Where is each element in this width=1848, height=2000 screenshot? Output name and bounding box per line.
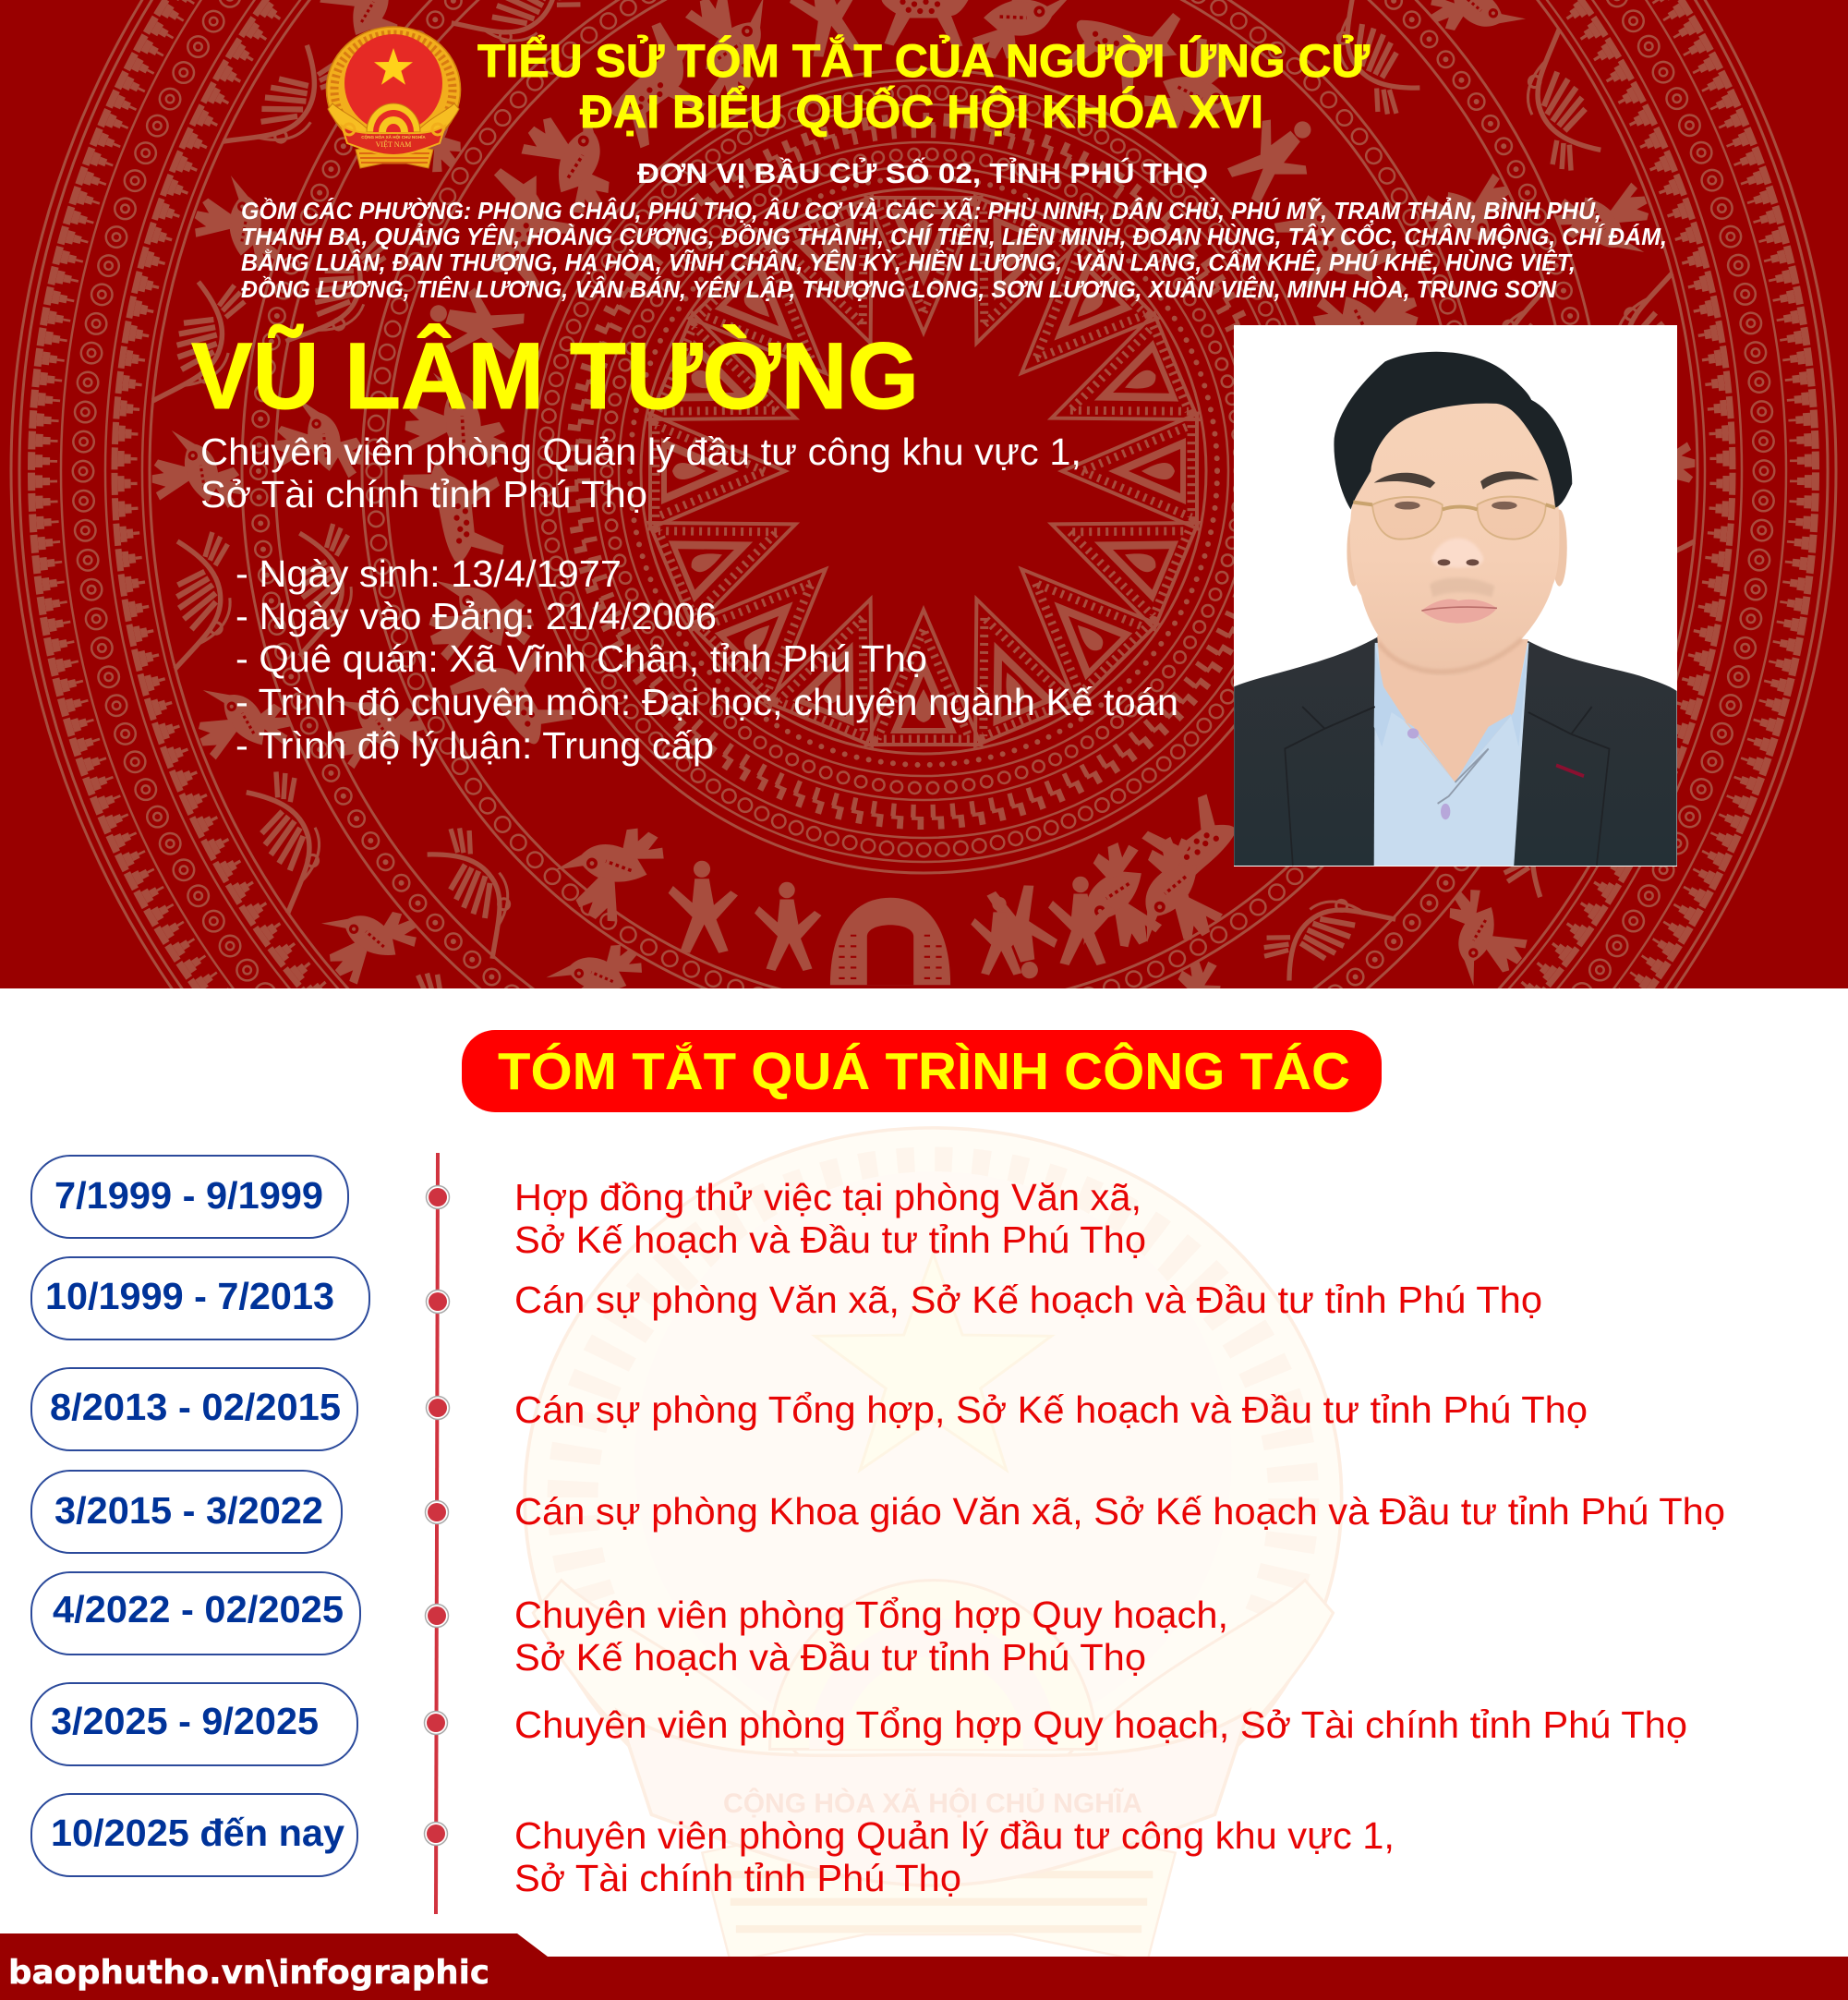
watermark emblem text: CỘNG HÒA XÃ HỘI CHỦ NGHĨA (723, 1788, 1142, 1819)
position text: Chuyên viên phòng Tổng hợp Quy hoạch, (514, 1594, 1228, 1636)
date pill: 7/1999 - 9/1999 (54, 1174, 323, 1217)
portrait photo (1234, 325, 1677, 867)
text block: current position: Sở Tài chính tỉnh Phú Thọ (200, 473, 647, 515)
watermark emblem (525, 1128, 1342, 1962)
position text (514, 1814, 1395, 1899)
date pill (31, 1471, 342, 1553)
position text (514, 1176, 1146, 1261)
position text: Chuyên viên phòng Tổng hợp Quy hoạch, Sở Tài chính tỉnh Phú Thọ (514, 1703, 1687, 1746)
panel: white timeline section (0, 988, 1848, 2000)
date pill (31, 1257, 369, 1339)
date pill: 3/2025 - 9/2025 (51, 1700, 319, 1742)
text block: personal details (236, 552, 1178, 767)
text block: wards and communes (241, 197, 1667, 303)
title (477, 34, 1371, 138)
date pill: 3/2015 - 3/2022 (54, 1489, 323, 1532)
text block: wards and communes: GỒM CÁC PHƯỜNG: PHONG CHÂU, PHÚ THỌ, ÂU CƠ VÀ CÁC XÃ: PHÙ NINH, DÂN CHỦ, PHÚ MỸ, TRẠM THẢN, BÌNH PHÚ, (241, 197, 1601, 224)
date pill: 4/2022 - 02/2025 (53, 1588, 344, 1630)
title: TIỂU SỬ TÓM TẮT CỦA NGƯỜI ỨNG CỬ (477, 34, 1371, 87)
position text: Cán sự phòng Khoa giáo Văn xã, Sở Kế hoạch và Đầu tư tỉnh Phú Thọ (514, 1490, 1725, 1533)
date pill (31, 1794, 357, 1876)
position text: Sở Tài chính tỉnh Phú Thọ (514, 1857, 961, 1899)
timeline dot (425, 1711, 447, 1735)
timeline row 2 (31, 1257, 1542, 1339)
text block: personal details: - Trình độ chuyên môn: Đại học, chuyên ngành Kế toán (236, 681, 1178, 723)
panel: header background (0, 0, 1848, 988)
icon: national emblem: CỘNG HÒA XÃ HỘI CHỦ NGHĨA (361, 133, 426, 139)
heading pill: work history: TÓM TẮT QUÁ TRÌNH CÔNG TÁC (498, 1041, 1350, 1101)
date pill (31, 1572, 360, 1655)
text block: personal details: - Quê quán: Xã Vĩnh Chân, tỉnh Phú Thọ (236, 637, 927, 680)
text block: personal details: - Trình độ lý luận: Trung cấp (236, 724, 714, 767)
date pill (31, 1368, 357, 1450)
text block: personal details: - Ngày vào Đảng: 21/4/2006 (236, 595, 717, 637)
position text: Sở Kế hoạch và Đầu tư tỉnh Phú Thọ (514, 1636, 1146, 1679)
timeline dot (427, 1290, 449, 1314)
text block: current position: Chuyên viên phòng Quản lý đầu tư công khu vực 1, (200, 430, 1081, 473)
position text: Chuyên viên phòng Quản lý đầu tư công khu vực 1, (514, 1814, 1395, 1857)
position text: Hợp đồng thử việc tại phòng Văn xã, (514, 1176, 1141, 1218)
position text (514, 1594, 1228, 1679)
timeline row 7 (31, 1794, 1395, 1899)
subtitle: constituency: ĐƠN VỊ BẦU CỬ SỐ 02, TỈNH PHÚ THỌ (637, 156, 1208, 189)
timeline dot (425, 1604, 449, 1628)
title: ĐẠI BIỂU QUỐC HỘI KHÓA XVI (580, 85, 1263, 138)
text block: wards and communes: BẰNG LUÂN, ĐAN THƯỢNG, HẠ HÒA, VĨNH CHÂN, YÊN KỲ, HIỀN LƯƠNG, VĂN LANG, CẨM KHÊ, PHÚ KHÊ, HÙNG VIỆT, (241, 248, 1576, 276)
icon: national emblem: VIỆT NAM (376, 139, 411, 149)
timeline dot (425, 1822, 447, 1846)
position text: Sở Kế hoạch và Đầu tư tỉnh Phú Thọ (514, 1218, 1146, 1261)
text block: current position (200, 430, 1081, 515)
date pill: 10/1999 - 7/2013 (45, 1275, 334, 1317)
icon: national emblem (327, 27, 460, 168)
date pill: 8/2013 - 02/2015 (50, 1386, 341, 1428)
timeline dot (427, 1186, 449, 1208)
text block: wards and communes: ĐỒNG LƯƠNG, TIÊN LƯƠNG, VÂN BÁN, YÊN LẬP, THƯỢNG LONG, SƠN LƯƠNG, XUÂN VIÊN, MINH HÒA, TRUNG SƠN (241, 275, 1557, 303)
footer source text: baophutho.vn\infographic (8, 1954, 489, 1992)
timeline line (436, 1153, 438, 1914)
timeline row 5 (31, 1572, 1228, 1679)
timeline row 1 (31, 1156, 1146, 1261)
text block: personal details: - Ngày sinh: 13/4/1977 (236, 552, 622, 595)
timeline row 6 (31, 1683, 1687, 1765)
date pill (31, 1156, 348, 1238)
heading pill: work history (462, 1030, 1382, 1112)
timeline dot (427, 1397, 449, 1419)
timeline dot (425, 1500, 449, 1524)
date pill: 10/2025 đến nay (51, 1812, 344, 1854)
date pill (31, 1683, 357, 1765)
bronze drum pattern (9, 0, 1838, 988)
timeline row 4 (31, 1471, 1725, 1553)
position text: Cán sự phòng Tổng hợp, Sở Kế hoạch và Đầu tư tỉnh Phú Thọ (514, 1388, 1588, 1431)
timeline row 3 (31, 1368, 1588, 1450)
candidate name: VŨ LÂM TƯỜNG (191, 323, 919, 429)
text block: wards and communes: THANH BA, QUẢNG YÊN, HOÀNG CƯƠNG, ĐỒNG THÀNH, CHÍ TIÊN, LIÊN MINH, ĐOAN HÙNG, TÂY CỐC, CHÂN MỘNG, CHÍ ĐÁM, (241, 223, 1667, 250)
footer bar (0, 1933, 1848, 2000)
position text: Cán sự phòng Văn xã, Sở Kế hoạch và Đầu tư tỉnh Phú Thọ (514, 1279, 1542, 1321)
